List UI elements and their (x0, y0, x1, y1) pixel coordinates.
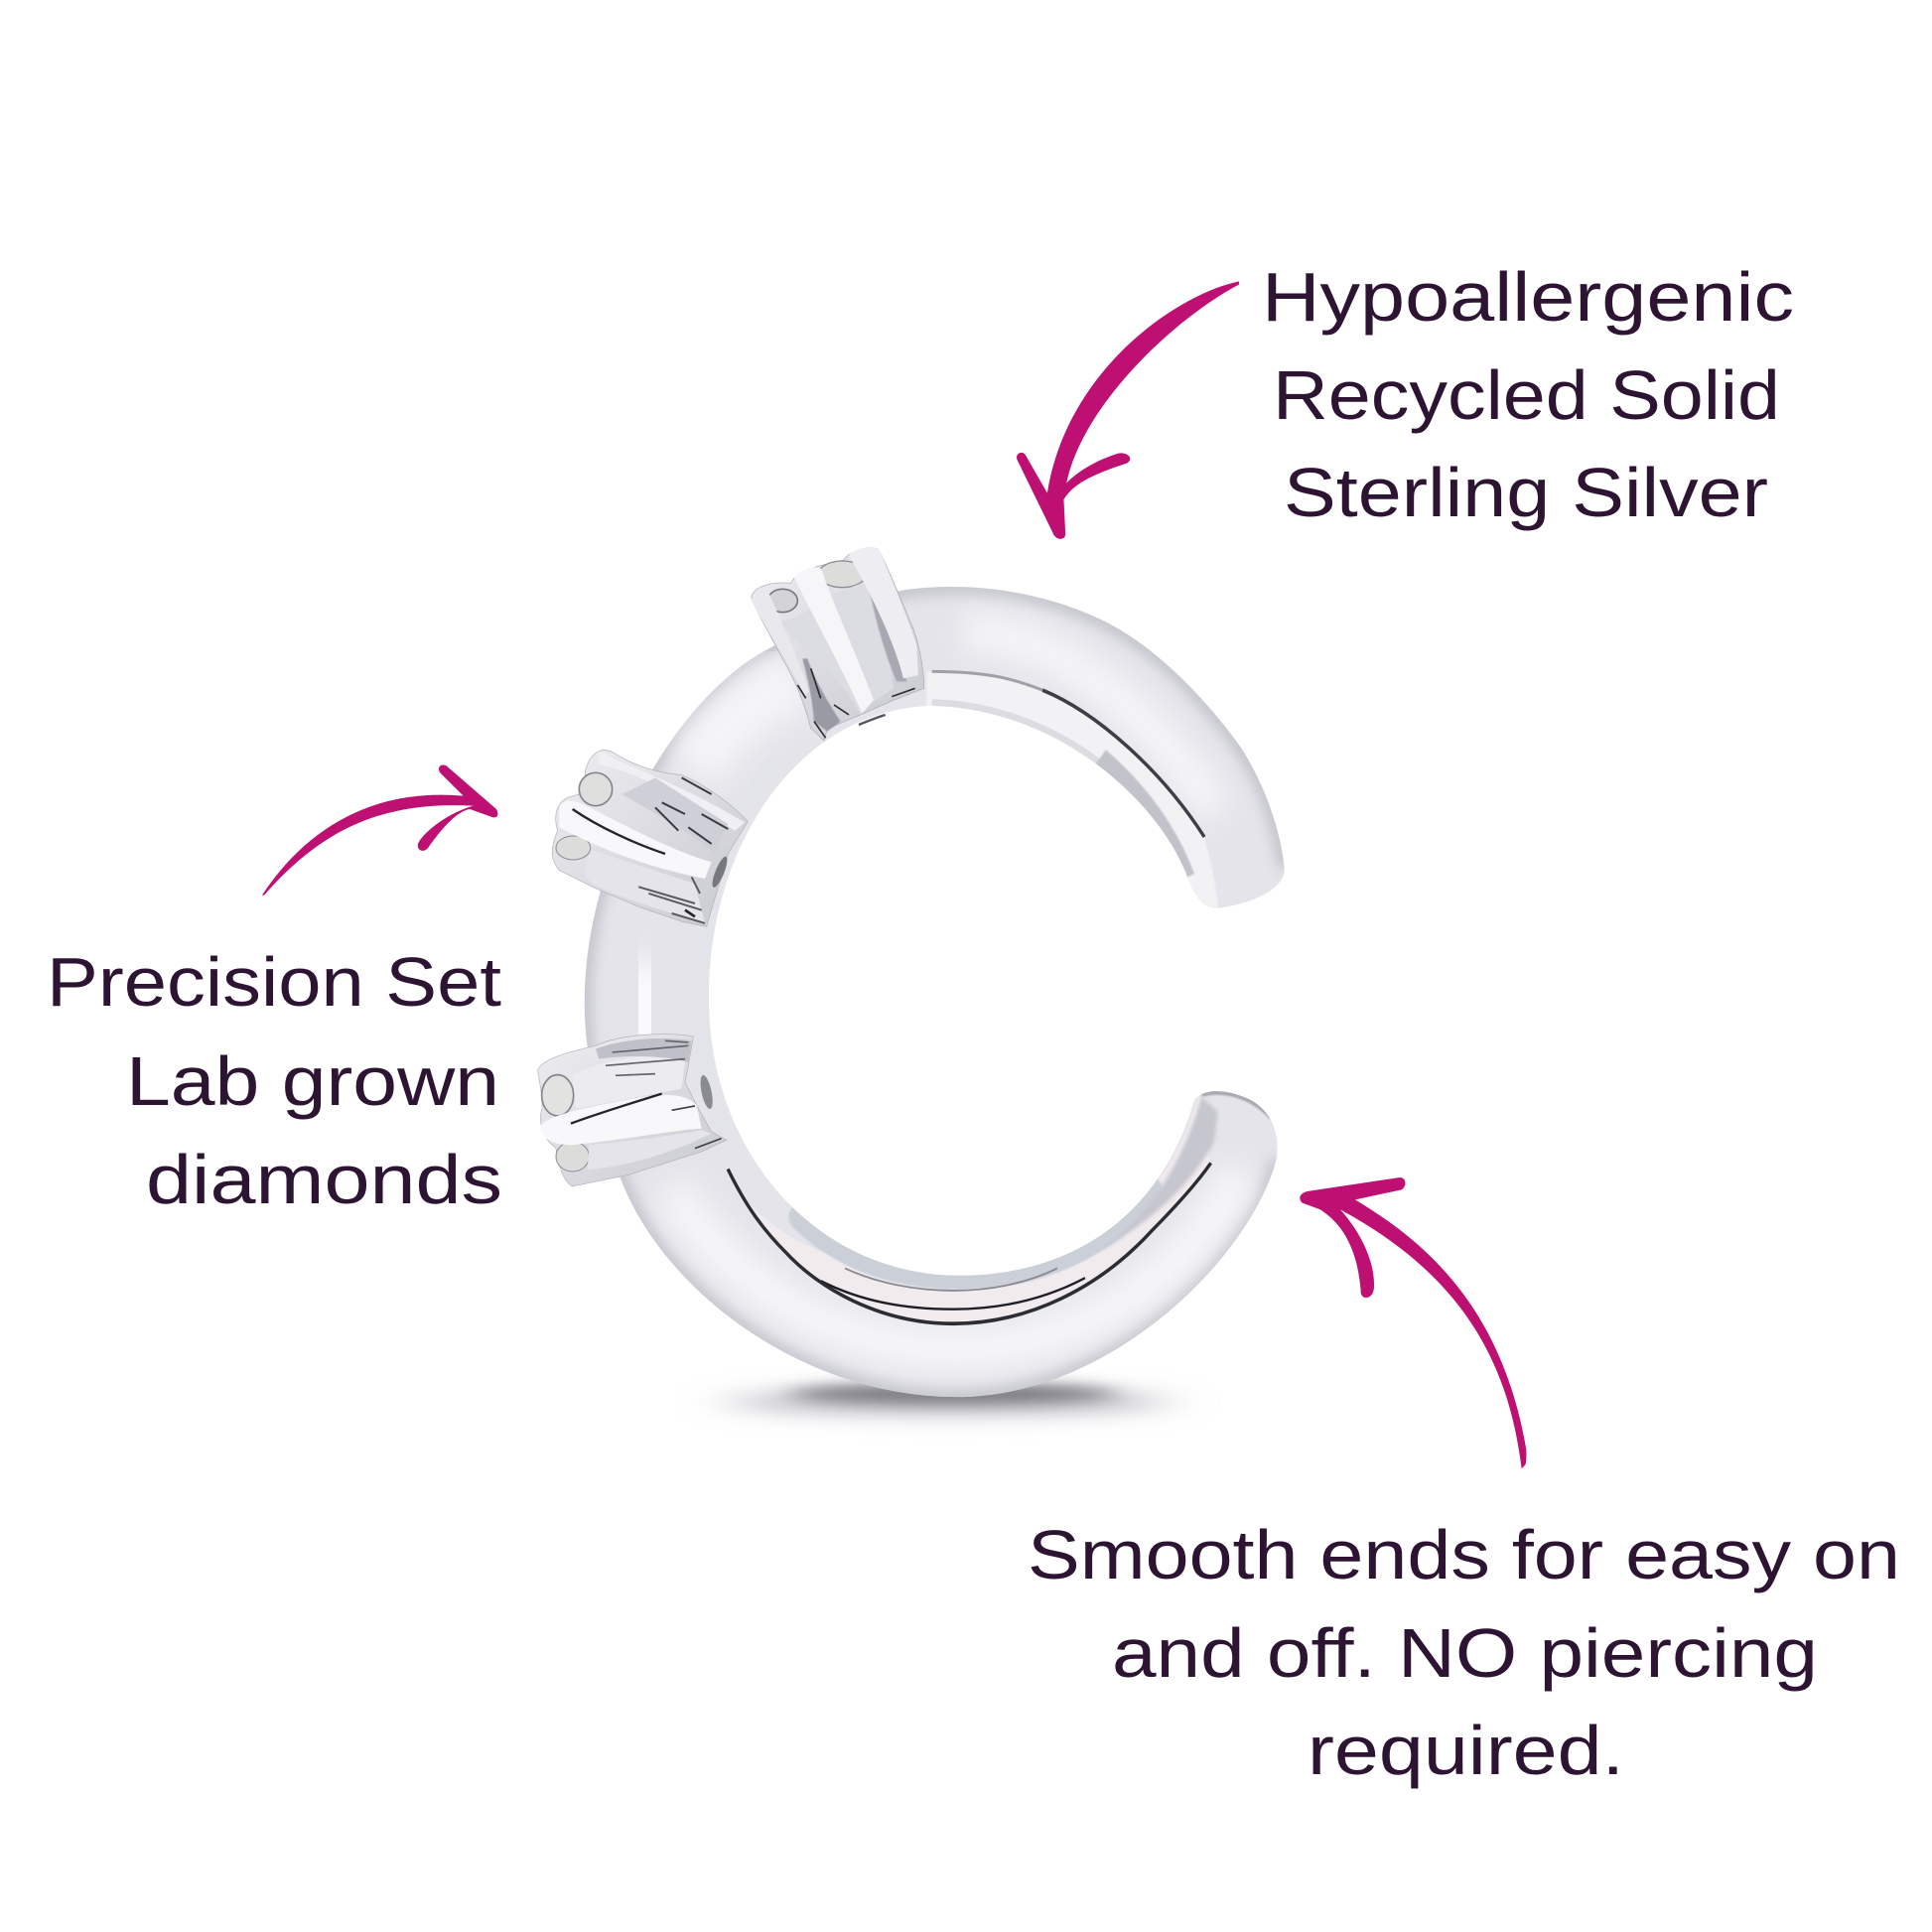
middle and lower diamond settings (538, 751, 748, 1186)
middle setting (552, 751, 748, 926)
arrow: pointing to diamonds (262, 765, 497, 896)
text: hypoallergenic silver (1262, 258, 1794, 531)
text: precision set diamonds (47, 943, 502, 1218)
text: hypoallergenic silver: Hypoallergenic (1262, 258, 1794, 336)
product photo: silver ear cuff (538, 547, 1285, 1416)
lower setting (538, 1035, 727, 1186)
text: smooth ends: Smooth ends for easy on (1028, 1516, 1900, 1593)
diamonds (767, 589, 797, 613)
hallmark stamps (710, 855, 730, 889)
text: smooth ends: and off. NO piercing (1112, 1614, 1818, 1692)
lower inner band (728, 1094, 1211, 1323)
text: precision set diamonds: Precision Set (47, 943, 501, 1021)
text: precision set diamonds: diamonds (146, 1141, 502, 1218)
upper inner band (926, 671, 1218, 907)
text: hypoallergenic silver: Recycled Solid (1273, 356, 1780, 434)
top diamond setting (752, 547, 924, 741)
arrow: pointing to ring end (1300, 1177, 1526, 1468)
infographic canvas (53, 270, 1895, 1789)
text: smooth ends (1028, 1516, 1900, 1789)
left inner band (694, 757, 779, 1136)
text: precision set diamonds: Lab grown (126, 1042, 499, 1120)
ground shadow (725, 1384, 1172, 1416)
text: smooth ends: required. (1308, 1712, 1624, 1789)
arrow: pointing to ring top (1017, 281, 1239, 539)
text: hypoallergenic silver: Sterling Silver (1284, 454, 1768, 531)
ring body (585, 587, 1285, 1397)
